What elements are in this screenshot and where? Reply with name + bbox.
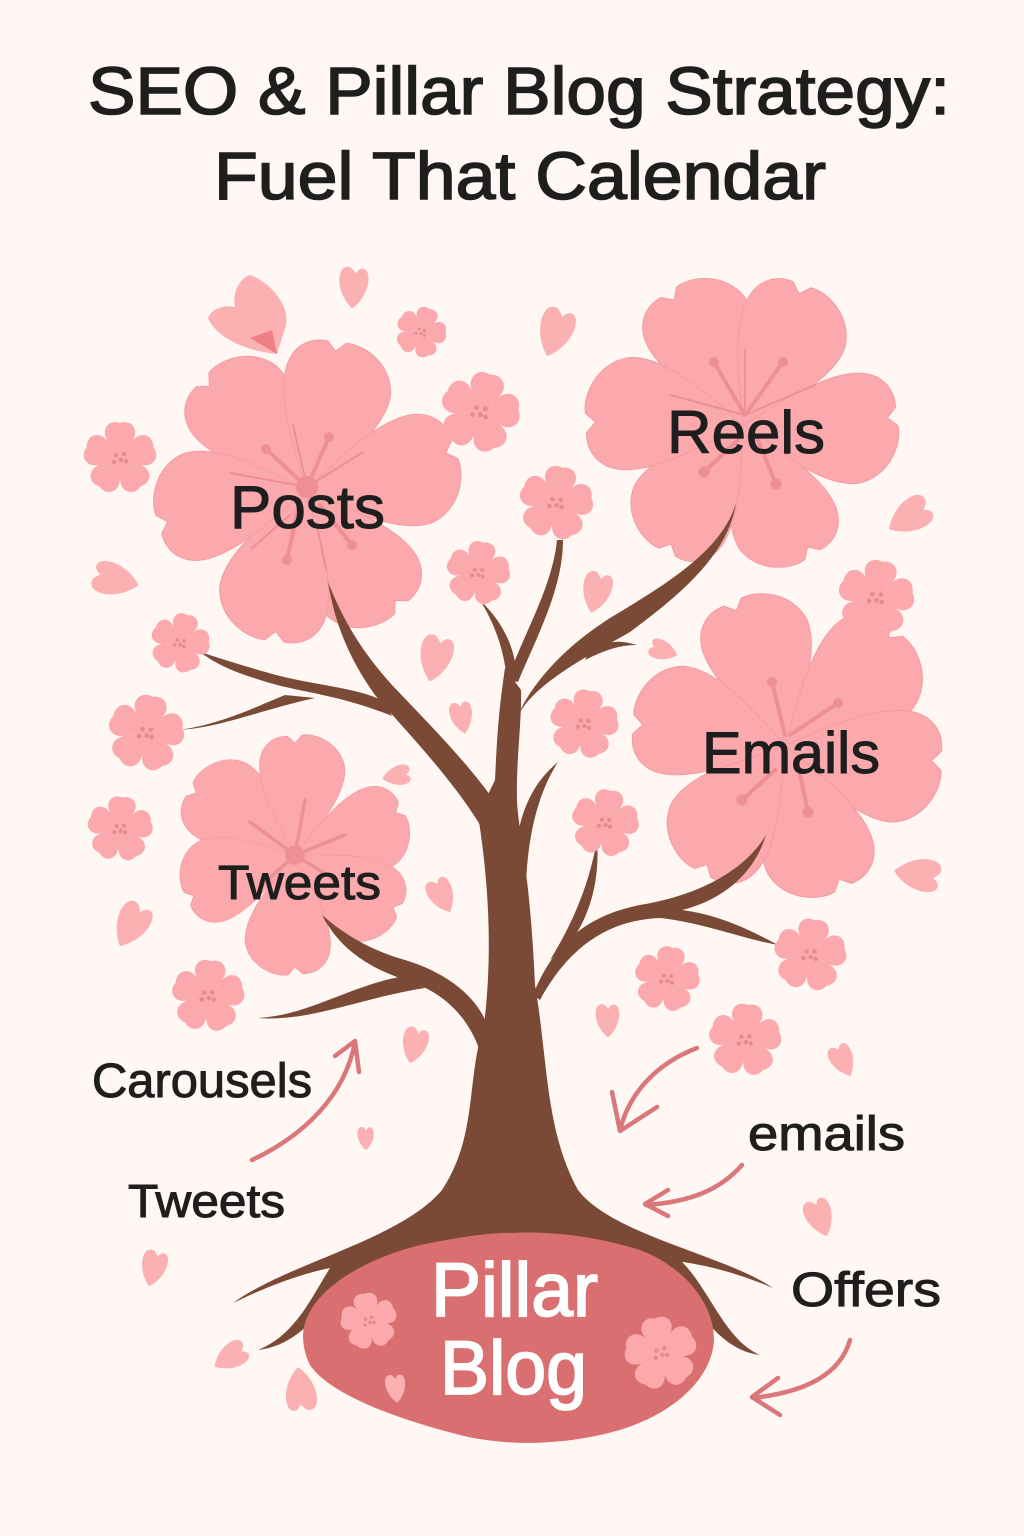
branch left lower bbox=[178, 695, 315, 730]
label: Posts: Posts bbox=[230, 474, 385, 541]
flower: Emails bbox=[621, 582, 952, 910]
labels bbox=[92, 399, 941, 1317]
blossoms on base bbox=[334, 1288, 706, 1404]
branch to Tweets bbox=[322, 915, 486, 1058]
branch upper centre bbox=[508, 540, 563, 682]
large petal top left bbox=[208, 275, 287, 354]
branch to Emails bbox=[533, 835, 778, 1000]
label: Pillar Blog bbox=[431, 1248, 598, 1411]
twig right of Reels branch bbox=[585, 642, 637, 660]
label: Pillar Blog: Pillar bbox=[431, 1248, 598, 1333]
small branch right bbox=[550, 840, 598, 960]
arrow: emails bbox=[645, 1165, 742, 1216]
title: SEO & Pillar Blog Strategy: bbox=[88, 54, 950, 129]
label: Emails: Emails bbox=[702, 721, 880, 786]
small branch centre right bbox=[515, 762, 558, 885]
branch to Posts bbox=[328, 582, 497, 828]
flower: Posts bbox=[147, 328, 469, 656]
arrow: offers bbox=[752, 1340, 850, 1415]
trunk and roots bbox=[233, 668, 773, 1355]
branch to Reels bbox=[512, 503, 736, 730]
arrows bbox=[252, 1041, 850, 1415]
branch upper left centre bbox=[480, 600, 516, 690]
label: Reels: Reels bbox=[667, 399, 825, 466]
label: Pillar Blog: Blog bbox=[440, 1326, 587, 1411]
arrow: from top right bbox=[612, 1048, 697, 1131]
small blossoms bbox=[81, 299, 923, 1081]
title bbox=[88, 54, 950, 214]
flower: Tweets bbox=[167, 731, 420, 979]
title: Fuel That Calendar bbox=[214, 139, 826, 214]
branch left upper bbox=[200, 652, 392, 716]
label: Carousels: Carousels bbox=[92, 1055, 312, 1108]
arrow: to Carousels bbox=[252, 1041, 359, 1160]
tree: trunk and branches bbox=[178, 503, 778, 1355]
label: emails lower: emails bbox=[748, 1108, 905, 1161]
label: Tweets lower: Tweets bbox=[128, 1175, 285, 1227]
twig left lower bbox=[258, 976, 425, 1018]
loose falling petals bbox=[89, 266, 943, 1412]
flower: Reels bbox=[579, 262, 901, 583]
pillar blog base bbox=[303, 1232, 714, 1443]
label: Offers: Offers bbox=[791, 1264, 941, 1317]
label: Tweets: Tweets bbox=[218, 857, 381, 910]
